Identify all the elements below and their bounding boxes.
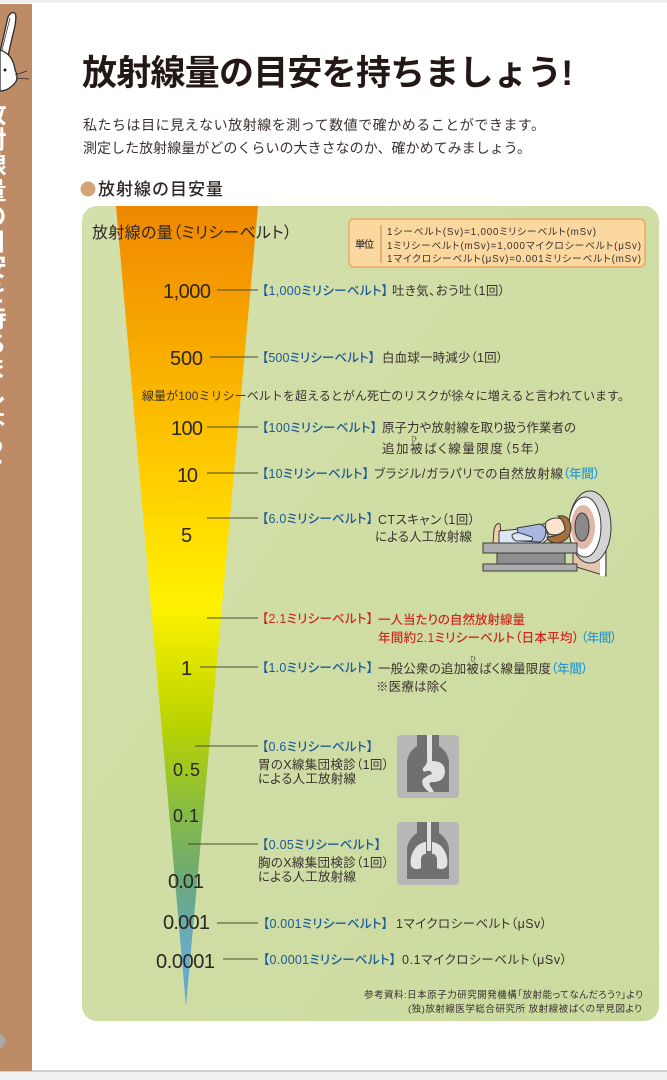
unit box xyxy=(349,219,645,267)
row: 2.1 average: 年間約2.1ミリシーベルト（日本平均） xyxy=(378,630,579,645)
row: 100: ひ xyxy=(411,436,417,443)
row: 0.001: 1マイクロシーベルト（μSv） xyxy=(396,917,547,931)
row: 0.05 chest X-ray: 【0.05ミリシーベルト】 xyxy=(262,838,381,852)
row: 6.0 CT: 【6.0ミリシーベルト】 xyxy=(262,512,373,526)
icon: CT scanner with patient xyxy=(483,491,611,576)
title: 放射線量の目安を持ちましょう! xyxy=(82,54,573,93)
row: 0.0001: 【0.0001ミリシーベルト】 xyxy=(263,953,396,967)
row: 1.0: （年間） xyxy=(551,662,588,676)
row: 10: 【10ミリシーベルト】 xyxy=(262,467,369,481)
sidebar xyxy=(0,4,32,1071)
unit box: 1マイクロシーベルト(μSv)=0.001ミリシーベルト(mSv) xyxy=(387,253,641,265)
intro text xyxy=(83,117,545,156)
row: 500: 白血球一時減少（1回） xyxy=(382,350,503,365)
row: 0.05 chest X-ray xyxy=(188,838,389,884)
row: 1000 xyxy=(163,281,505,303)
row: 1000: 1,000 xyxy=(163,281,211,303)
icon: chest X-ray xyxy=(397,822,459,885)
row: 0.05 chest X-ray: による人工放射線 xyxy=(258,869,356,884)
row: 100: 原子力や放射線を取り扱う作業者の xyxy=(382,420,576,435)
row: 0.6 stomach X-ray: 胃のX線集団検診（1回） xyxy=(258,757,389,772)
row: 100: 追加被ばく線量限度（5年） xyxy=(382,441,541,456)
row: 100: 100 xyxy=(171,418,203,440)
row: 0.6 stomach X-ray: による人工放射線 xyxy=(258,771,356,786)
row: 1.0: 一般公衆の追加被ばく線量限度 xyxy=(378,661,551,676)
row: 0.001: 0.001 xyxy=(163,912,210,934)
scale label 0.5: 0.5 xyxy=(173,760,200,780)
row: 100 xyxy=(171,418,576,456)
panel: dose chart xyxy=(82,206,659,1021)
row: 0.6 stomach X-ray: 【0.6ミリシーベルト】 xyxy=(262,740,373,754)
page marker xyxy=(0,1033,5,1049)
row: 6.0 CT xyxy=(181,512,475,547)
icon: rabbit xyxy=(0,13,29,91)
row: 500 xyxy=(170,348,503,370)
source note: 参考資料:日本原子力研究開発機構「放射能ってなんだろう?」より xyxy=(364,989,643,1001)
row: 6.0 CT: CTスキャン（1回） xyxy=(378,513,475,527)
axis title: 放射線の量（ミリシーベルト） xyxy=(92,224,292,242)
row: 1.0: ひ xyxy=(470,656,476,663)
row: 10 xyxy=(177,465,600,487)
scale label 0.1: 0.1 xyxy=(173,806,199,826)
row: 10: ブラジル/ガラパリでの自然放射線 xyxy=(374,466,563,481)
row: 500: 500 xyxy=(170,348,203,370)
section heading: 放射線の目安量 xyxy=(98,180,223,199)
row: 0.0001: 0.0001 xyxy=(156,951,215,973)
row: 1000: 吐き気、おう吐（1回） xyxy=(392,283,505,298)
dose gradient wedge xyxy=(116,206,258,1006)
intro text: 私たちは目に見えない放射線を測って数値で確かめることができます。 xyxy=(83,117,545,133)
row: 0.6 stomach X-ray xyxy=(195,740,389,786)
row: 0.0001: 0.1マイクロシーベルト（μSv） xyxy=(402,953,567,967)
row: 1.0: 【1.0ミリシーベルト】 xyxy=(262,661,373,675)
scale label 0.01: 0.01 xyxy=(168,871,204,893)
row: 0.05 chest X-ray: 胸のX線集団検診（1回） xyxy=(258,855,389,870)
row: 6.0 CT: による人工放射線 xyxy=(375,529,472,544)
unit box: 単位 xyxy=(355,238,374,251)
row: 2.1 average: 【2.1ミリシーベルト】 xyxy=(262,612,373,626)
unit box: 1シーベルト(Sv)=1,000ミリシーベルト(mSv) xyxy=(387,226,596,238)
row: 2.1 average: （年間） xyxy=(581,631,617,645)
row: 1000: 【1,000ミリシーベルト】 xyxy=(262,284,388,298)
row: 500: 【500ミリシーベルト】 xyxy=(262,351,375,365)
row: 0.0001 xyxy=(156,951,567,973)
source note: (独)放射線医学総合研究所 放射線被ばくの早見図より xyxy=(408,1003,642,1015)
row: 2.1 average: 一人当たりの自然放射線量 xyxy=(378,612,525,627)
row: 10: （年間） xyxy=(563,467,600,481)
row: 2.1 average xyxy=(207,612,617,645)
icon: stomach X-ray xyxy=(397,735,459,798)
risk note: 線量が100ミリシーベルトを超えるとがん死亡のリスクが徐々に増えると言われています。 xyxy=(142,388,630,403)
unit box: 1ミリシーベルト(mSv)=1,000マイクロシーベルト(μSv) xyxy=(387,240,641,252)
row: 1.0 xyxy=(181,656,588,694)
row: 1.0: ※医療は除く xyxy=(376,680,448,694)
row: 0.001 xyxy=(163,912,547,934)
row: 6.0 CT: 5 xyxy=(181,525,192,547)
row: 1.0: 1 xyxy=(181,658,192,680)
source note xyxy=(364,989,643,1015)
row: 100: 【100ミリシーベルト】 xyxy=(262,421,377,435)
row: 0.001: 【0.001ミリシーベルト】 xyxy=(263,917,388,931)
row: 10: 10 xyxy=(177,465,198,487)
intro text: 測定した放射線量がどのくらいの大きさなのか、確かめてみましょう。 xyxy=(83,140,531,156)
